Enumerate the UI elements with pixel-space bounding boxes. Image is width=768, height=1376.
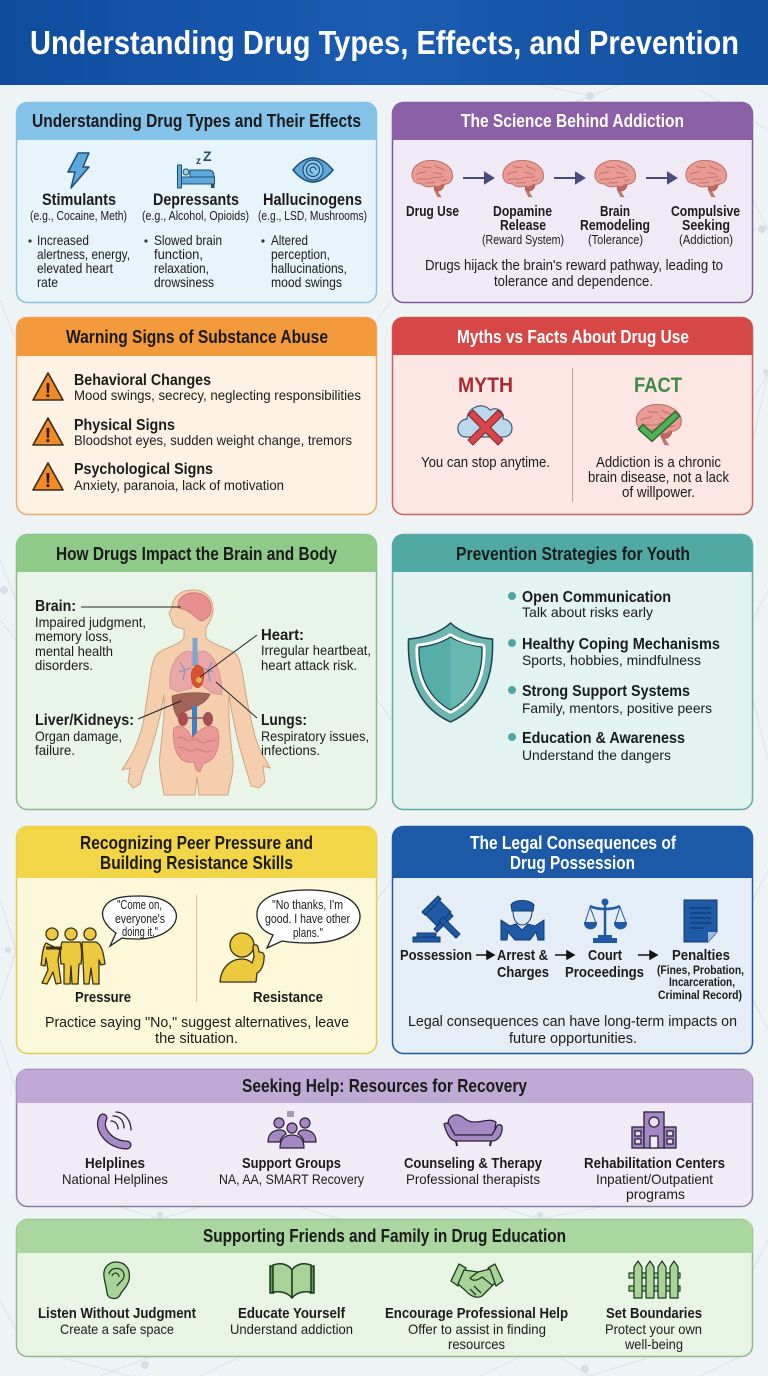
step: penalties: Incarceration, [669, 977, 735, 989]
item: set boundaries: Set Boundaries [606, 1306, 702, 1322]
panel: brain and body impact [16, 534, 376, 810]
icon: handshake [451, 1264, 503, 1297]
column: hallucinogens: mood swings [271, 274, 342, 290]
column: depressants: Depressants [153, 190, 239, 209]
step: dopamine release: Release [500, 218, 546, 234]
arrow [476, 951, 494, 959]
speech bubble: resistance: good. I have other [265, 912, 350, 926]
icon: hypnotic eye [293, 158, 333, 182]
item: physical signs: Bloodshot eyes, sudden weight change, tremors [74, 432, 352, 448]
icon: warning triangle 2 [33, 418, 63, 447]
arrow 2 [554, 173, 584, 183]
step: compulsive seeking: Seeking [682, 218, 730, 234]
icon: therapy couch [444, 1115, 502, 1146]
item: support systems: Family, mentors, positive peers [522, 700, 712, 716]
step: arrest and charges [497, 947, 549, 981]
column: depressants: relaxation, [154, 260, 209, 276]
heading: supporting: Supporting Friends and Family in Drug Education [203, 1226, 566, 1246]
callout: heart [200, 627, 371, 677]
step: penalties: (Fines, Probation, [657, 965, 744, 977]
step: dopamine release: (Reward System) [482, 233, 564, 247]
icon: brain 2 [503, 160, 544, 197]
item: encourage help: Offer to assist in finding [408, 1321, 546, 1337]
text: resistance tips: Practice saying "No," suggest alternatives, leave [45, 1014, 349, 1031]
icon: warning triangle 3 [33, 463, 63, 492]
icon: open book [270, 1264, 314, 1298]
text: myth statement: You can stop anytime. [421, 455, 550, 471]
icon: penalty document [684, 900, 717, 942]
callout: lungs: infections. [261, 742, 320, 758]
icon: ear [104, 1262, 129, 1299]
icon: brain 4 [686, 160, 727, 197]
step: compulsive seeking [671, 204, 740, 247]
panel: supporting friends and family [16, 1220, 752, 1356]
heading: science: The Science Behind Addiction [461, 111, 684, 131]
icon: warning triangle 1: ! [45, 380, 51, 402]
column: stimulants: Increased [37, 232, 89, 248]
column: stimulants: rate [37, 274, 58, 290]
step: drug use: Drug Use [406, 204, 459, 220]
item: behavioral changes: Mood swings, secrecy, neglecting responsibilities [74, 387, 361, 403]
callout: brain: Impaired judgment, [35, 614, 146, 630]
callout: lungs: Respiratory issues, [261, 728, 369, 744]
item: support groups: NA, AA, SMART Recovery [219, 1171, 364, 1187]
item: education and awareness: Education & Awareness [522, 730, 685, 747]
column: depressants: (e.g., Alcohol, Opioids) [142, 209, 249, 223]
icon: scales of justice [585, 900, 626, 942]
column: hallucinogens: Altered [271, 232, 308, 248]
speech bubble: resistance [257, 890, 360, 948]
panel: legal consequences [392, 826, 752, 1054]
panel: peer pressure [16, 826, 376, 1054]
column: depressants: Slowed brain [154, 232, 222, 248]
title banner [0, 0, 768, 85]
step: brain remodeling: Brain [600, 204, 630, 220]
step: court proceedings [565, 947, 644, 981]
text: fact statement: of willpower. [622, 485, 695, 501]
chart: human body anatomy [122, 590, 270, 795]
item: healthy coping: Sports, hobbies, mindfulness [522, 652, 701, 668]
speech bubble: pressure [102, 896, 176, 946]
callout: heart: Irregular heartbeat, [261, 642, 371, 658]
heading: myths vs facts: Myths vs Facts About Drug Use [457, 327, 689, 347]
arrow [555, 951, 574, 959]
step: penalties [657, 947, 744, 1002]
panel: prevention strategies [392, 534, 752, 810]
item: healthy coping: Healthy Coping Mechanisms [522, 636, 720, 653]
item: support systems: Strong Support Systems [522, 683, 690, 700]
heading: legal: The Legal Consequences of [470, 833, 677, 853]
item: support groups: Support Groups [242, 1156, 341, 1172]
icon: fence [629, 1261, 680, 1298]
callout: heart: Heart: [261, 627, 304, 644]
heading: prevention: Prevention Strategies for Youth [456, 544, 690, 564]
column: stimulants: alertness, energy, [37, 246, 130, 262]
icon: person raising finger [220, 933, 264, 982]
item: encourage help [385, 1306, 568, 1352]
icon: sleeping bed: Z [203, 148, 212, 164]
panel: myths vs facts [392, 318, 752, 514]
text: fact statement [588, 455, 730, 501]
callout: brain: memory loss, [35, 628, 112, 644]
item: open communication: Talk about risks early [522, 604, 653, 620]
item: behavioral changes [74, 372, 361, 403]
item: counseling: Professional therapists [406, 1171, 540, 1187]
text: science summary: Drugs hijack the brain's reward pathway, leading to [425, 258, 723, 274]
callout: brain: disorders. [35, 657, 93, 673]
column: stimulants: elevated heart [37, 260, 113, 276]
item: support groups [219, 1156, 364, 1187]
arrow 1 [463, 173, 493, 183]
icon: telephone [101, 1112, 131, 1145]
item: encourage help: Encourage Professional Help [385, 1306, 568, 1322]
step: brain remodeling: Remodeling [580, 218, 650, 234]
column: stimulants: Stimulants [42, 190, 116, 209]
item: rehabilitation centers: Inpatient/Outpatient [596, 1171, 713, 1187]
item: education and awareness: Understand the dangers [522, 747, 671, 763]
item: healthy coping [508, 636, 720, 668]
step: arrest and charges: Charges [497, 964, 549, 981]
column: hallucinogens: perception, [271, 246, 330, 262]
item: rehabilitation centers [584, 1156, 725, 1202]
callout: heart: heart attack risk. [261, 657, 357, 673]
item: set boundaries [605, 1306, 702, 1352]
icon: rehabilitation building [632, 1112, 676, 1148]
icon: arrested officer [501, 900, 544, 940]
icon: sleeping bed: z [196, 156, 201, 167]
heading: peer pressure [80, 833, 313, 873]
item: educate: Educate Yourself [238, 1306, 345, 1322]
speech bubble: pressure: doing it." [122, 925, 158, 939]
callout: liver and kidneys: Organ damage, [35, 728, 122, 744]
item: counseling: Counseling & Therapy [404, 1156, 542, 1172]
item: encourage help: resources [448, 1336, 505, 1352]
item: listen: Listen Without Judgment [38, 1306, 196, 1322]
item: listen [38, 1306, 196, 1337]
step: penalties: Criminal Record) [658, 990, 742, 1002]
heading: peer pressure: Building Resistance Skills [100, 853, 293, 873]
step: brain remodeling [580, 204, 650, 247]
item: set boundaries: Protect your own [605, 1321, 702, 1337]
step: possession: Possession [400, 947, 472, 964]
item: listen: Create a safe space [60, 1321, 174, 1337]
step: compulsive seeking: (Addiction) [679, 233, 733, 247]
panel: science of addiction [392, 102, 752, 302]
panel: seeking help [16, 1070, 752, 1206]
column: stimulants: (e.g., Cocaine, Meth) [30, 209, 127, 223]
item: physical signs [74, 417, 352, 448]
speech bubble: pressure: "Come on, [117, 898, 162, 912]
arrow 3 [646, 173, 676, 183]
item: support systems [508, 683, 712, 716]
heading: legal [470, 833, 677, 873]
step: penalties: Penalties [672, 947, 730, 964]
icon: brain with check [636, 405, 681, 445]
icon: sleeping bed [178, 148, 214, 188]
column: depressants: function, [154, 246, 203, 262]
item: rehabilitation centers: Rehabilitation Centers [584, 1156, 725, 1172]
column: stimulants [28, 190, 130, 290]
icon: shield [408, 623, 493, 722]
item: set boundaries: well-being [624, 1336, 683, 1352]
step: court proceedings: Proceedings [565, 964, 644, 981]
column: hallucinogens: Hallucinogens [263, 190, 362, 209]
icon: cloud with cross [458, 406, 512, 440]
item: counseling [404, 1156, 542, 1187]
text: science summary: tolerance and dependence. [494, 274, 653, 290]
label: myth: MYTH [458, 374, 513, 397]
icon: support group [268, 1111, 316, 1148]
text: legal summary: Legal consequences can have long-term impacts on [408, 1013, 737, 1030]
item: open communication [508, 589, 671, 620]
panel: warning signs [16, 318, 376, 514]
item: helplines: Helplines [85, 1156, 145, 1172]
column: hallucinogens [258, 190, 367, 290]
heading: seeking help: Seeking Help: Resources for Recovery [242, 1076, 527, 1096]
label: fact: FACT [634, 374, 682, 397]
heading: impact: How Drugs Impact the Brain and Body [56, 544, 337, 564]
item: psychological signs [74, 461, 284, 493]
item: helplines: National Helplines [62, 1171, 168, 1187]
item: behavioral changes: Behavioral Changes [74, 372, 211, 389]
column: depressants: drowsiness [154, 274, 214, 290]
text: fact statement: brain disease, not a lack [588, 470, 730, 486]
heading: peer pressure: Recognizing Peer Pressure and [80, 833, 313, 853]
item: physical signs: Physical Signs [74, 417, 175, 434]
speech bubble: resistance: plans." [293, 926, 323, 940]
column: hallucinogens: (e.g., LSD, Mushrooms) [258, 209, 367, 223]
heading: warning signs: Warning Signs of Substance Abuse [66, 327, 328, 347]
icon: lightning bolt [68, 153, 89, 188]
text: fact statement: Addiction is a chronic [596, 455, 721, 471]
step: compulsive seeking: Compulsive [671, 204, 740, 220]
text: resistance tips: the situation. [155, 1030, 238, 1047]
column: depressants [142, 190, 249, 290]
item: open communication: Open Communication [522, 589, 671, 606]
callout: brain: Brain: [35, 598, 76, 615]
text: science summary [425, 258, 723, 290]
callout: lungs: Lungs: [261, 712, 307, 729]
speech bubble: resistance: "No thanks, I'm [272, 898, 343, 912]
label: pressure: Pressure [75, 989, 131, 1006]
item: psychological signs: Anxiety, paranoia, lack of motivation [74, 477, 284, 493]
heading: legal: Drug Possession [510, 853, 635, 873]
item: education and awareness [508, 730, 685, 763]
icon: brain 1 [412, 160, 453, 197]
item: helplines [62, 1156, 168, 1187]
icon: warning triangle 2: ! [45, 425, 51, 447]
heading: drug types: Understanding Drug Types and Their Effects [32, 111, 361, 131]
label: resistance: Resistance [253, 989, 323, 1006]
step: dopamine release: Dopamine [493, 204, 552, 220]
text: resistance tips [45, 1014, 349, 1047]
step: brain remodeling: (Tolerance) [588, 233, 643, 247]
item: rehabilitation centers: programs [626, 1186, 685, 1202]
item: educate: Understand addiction [230, 1321, 353, 1337]
step: dopamine release [482, 204, 564, 247]
callout: brain: mental health [35, 643, 113, 659]
text: legal summary [408, 1013, 737, 1047]
speech bubble: pressure: everyone's [115, 912, 165, 926]
panel: drug types [16, 102, 376, 302]
callout: brain [35, 598, 181, 673]
column: hallucinogens: hallucinations, [271, 260, 347, 276]
arrow [638, 951, 657, 959]
text: legal summary: future opportunities. [509, 1030, 637, 1047]
item: psychological signs: Psychological Signs [74, 461, 213, 478]
step: arrest and charges: Arrest & [497, 947, 548, 964]
icon: warning triangle 3: ! [45, 470, 51, 492]
callout: liver and kidneys [35, 701, 181, 758]
icon: group of three people [41, 928, 105, 984]
item: educate [230, 1306, 353, 1337]
icon: warning triangle 1 [33, 373, 63, 402]
callout: liver and kidneys: Liver/Kidneys: [35, 712, 134, 729]
icon: brain 3 [595, 160, 636, 197]
icon: gavel [413, 896, 460, 942]
callout: lungs [216, 682, 369, 758]
step: court proceedings: Court [588, 947, 622, 964]
callout: liver and kidneys: failure. [35, 742, 75, 758]
